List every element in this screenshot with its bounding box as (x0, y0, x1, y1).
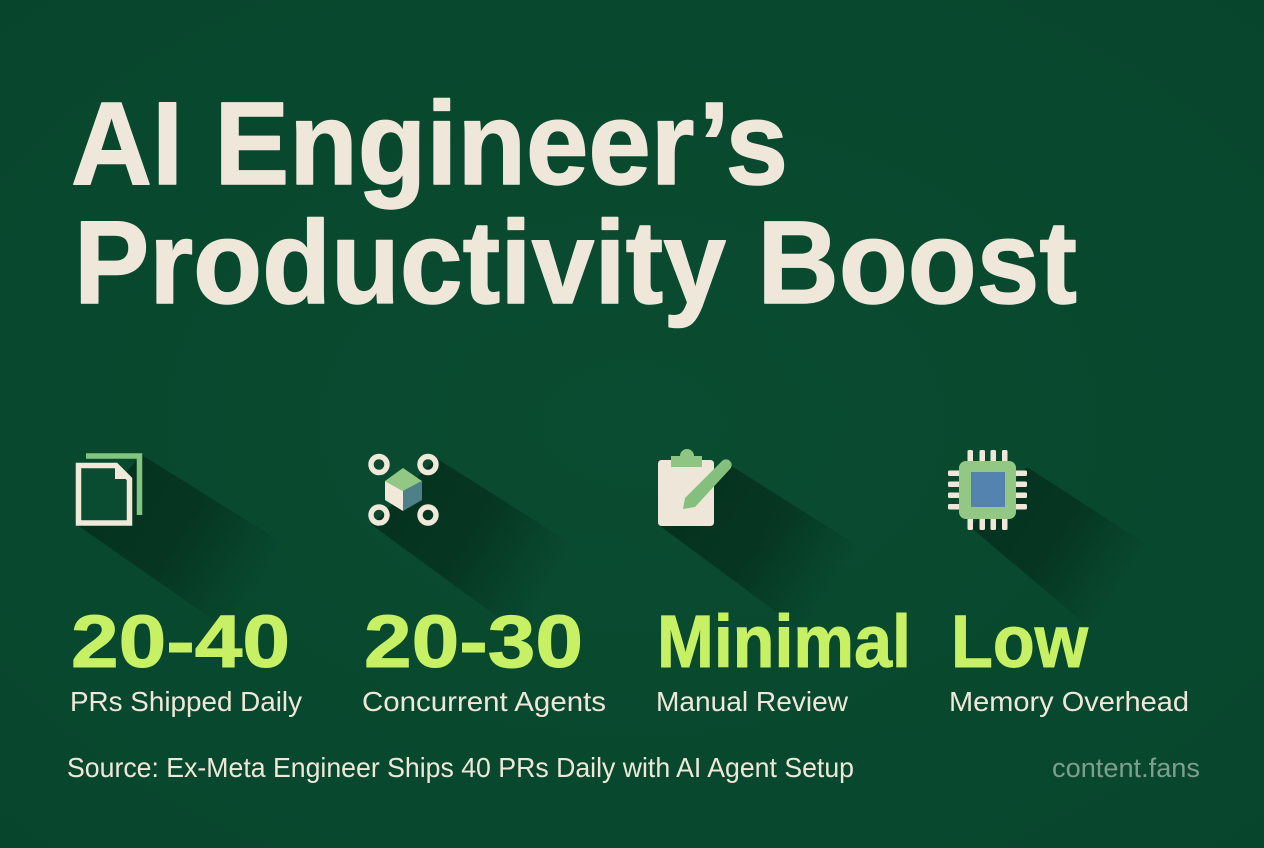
value: Minimal: Minimal (657, 600, 911, 683)
icon: stacked documents (78, 456, 140, 523)
title: Productivity Boost (74, 197, 1077, 329)
icon long shadow: documents (77, 455, 320, 626)
stat: manual review (656, 449, 911, 717)
icon: clipboard and pencil (658, 449, 732, 526)
icon: microchip (948, 450, 1027, 530)
stat: memory overhead (948, 450, 1189, 717)
label: Memory Overhead: Memory Overhead (949, 686, 1189, 717)
label: Concurrent Agents: Concurrent Agents (362, 686, 606, 717)
value: 20-30: 20-30 (364, 600, 583, 683)
label: PRs Shipped Daily: PRs Shipped Daily (70, 686, 302, 717)
icon long shadow: agents (372, 458, 610, 626)
title: AI Engineer’s (71, 78, 788, 210)
stat: concurrent agents (362, 456, 610, 717)
title (71, 78, 1077, 329)
source line: Source: Ex-Meta Engineer Ships 40 PRs Daily with AI Agent Setup (67, 752, 854, 783)
brand: content.fans: content.fans (1052, 753, 1200, 783)
value: 20-40: 20-40 (71, 600, 290, 683)
stat: PRs shipped daily (70, 455, 320, 717)
icon: cube with four agent rings (371, 456, 436, 523)
value: Low: Low (951, 600, 1088, 683)
icon long shadow: clipboard (660, 465, 890, 626)
label: Manual Review: Manual Review (656, 686, 849, 717)
icon long shadow: chip (970, 467, 1180, 624)
